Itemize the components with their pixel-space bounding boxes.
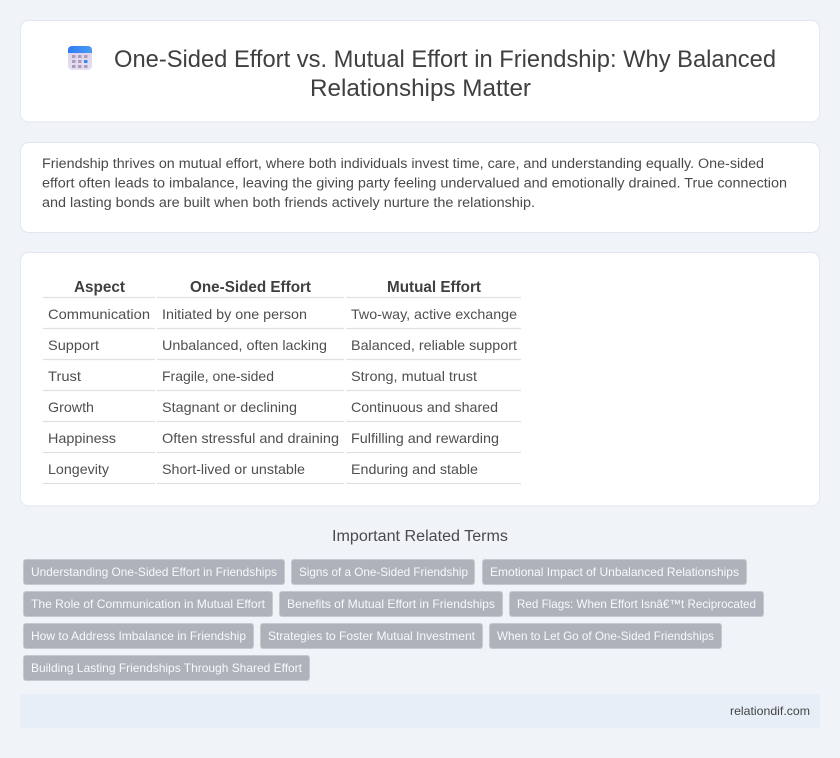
tag [482, 560, 746, 584]
tag [280, 592, 502, 616]
tag [24, 560, 284, 584]
title: One-Sided Effort vs. Mutual Effort in Friendship: Why Balanced [114, 46, 776, 73]
row: longevity: Longevity [48, 461, 109, 477]
row: growth: Continuous and shared [351, 399, 498, 415]
tag [24, 624, 254, 648]
table header: One-Sided Effort [190, 279, 311, 296]
table header: Aspect [74, 279, 125, 296]
tag: Understanding One-Sided Effort in Friendships [31, 565, 277, 579]
row: communication: Initiated by one person [162, 306, 307, 322]
tag: Building Lasting Friendships Through Shared Effort [31, 661, 303, 675]
footer: relationdif.com [730, 704, 810, 718]
intro paragraph [42, 156, 787, 211]
tag: How to Address Imbalance in Friendship [31, 629, 246, 643]
row: trust [48, 368, 477, 384]
tag: The Role of Communication in Mutual Effort [31, 597, 266, 611]
row: support: Support [48, 337, 99, 353]
intro paragraph: Friendship thrives on mutual effort, where both individuals invest time, care, and understanding equally. One-sided [42, 156, 764, 172]
row: longevity: Short-lived or unstable [162, 461, 305, 477]
row: communication [48, 306, 517, 322]
row: support: Unbalanced, often lacking [162, 337, 327, 353]
row: support [48, 337, 517, 353]
tag: Benefits of Mutual Effort in Friendships [287, 597, 495, 611]
row: communication: Two-way, active exchange [351, 306, 517, 322]
row: longevity: Enduring and stable [351, 461, 478, 477]
intro paragraph: and lasting bonds are built when both friends actively nurture the relationship. [42, 195, 535, 211]
footer [20, 694, 820, 728]
panel: comparison table [20, 252, 820, 506]
row: happiness: Often stressful and draining [162, 430, 339, 446]
tag [24, 592, 272, 616]
row: growth: Stagnant or declining [162, 399, 297, 415]
heading: important related terms: Important Related Terms [332, 528, 508, 545]
row: trust: Strong, mutual trust [351, 368, 477, 384]
tag: When to Let Go of One-Sided Friendships [497, 629, 714, 643]
tag: Emotional Impact of Unbalanced Relationships [490, 565, 739, 579]
tag: Red Flags: When Effort Isnâ€™t Reciprocated [517, 597, 756, 611]
title [114, 46, 776, 102]
row: growth: Growth [48, 399, 94, 415]
row: communication: Communication [48, 306, 150, 322]
row: happiness: Fulfilling and rewarding [351, 430, 499, 446]
row: support: Balanced, reliable support [351, 337, 517, 353]
tag: Signs of a One-Sided Friendship [299, 565, 468, 579]
related term tags [24, 560, 764, 680]
tag [260, 624, 482, 648]
row: happiness [48, 430, 499, 446]
table header: Mutual Effort [387, 279, 481, 296]
row: trust: Fragile, one-sided [162, 368, 274, 384]
panel: header [20, 20, 820, 122]
row: growth [48, 399, 498, 415]
tag [24, 656, 310, 680]
tag [292, 560, 474, 584]
row: happiness: Happiness [48, 430, 116, 446]
title: Relationships Matter [310, 75, 531, 102]
row: longevity [48, 461, 478, 477]
row: trust: Trust [48, 368, 81, 384]
intro paragraph: effort often leads to imbalance, leaving the giving party feeling undervalued and emotionally drained. True connection [42, 176, 787, 192]
tag [510, 592, 764, 616]
tag: Strategies to Foster Mutual Investment [268, 629, 476, 643]
panel: intro text [20, 142, 820, 232]
icon: calendar [68, 46, 92, 70]
tag [490, 624, 722, 648]
table header [74, 279, 481, 296]
